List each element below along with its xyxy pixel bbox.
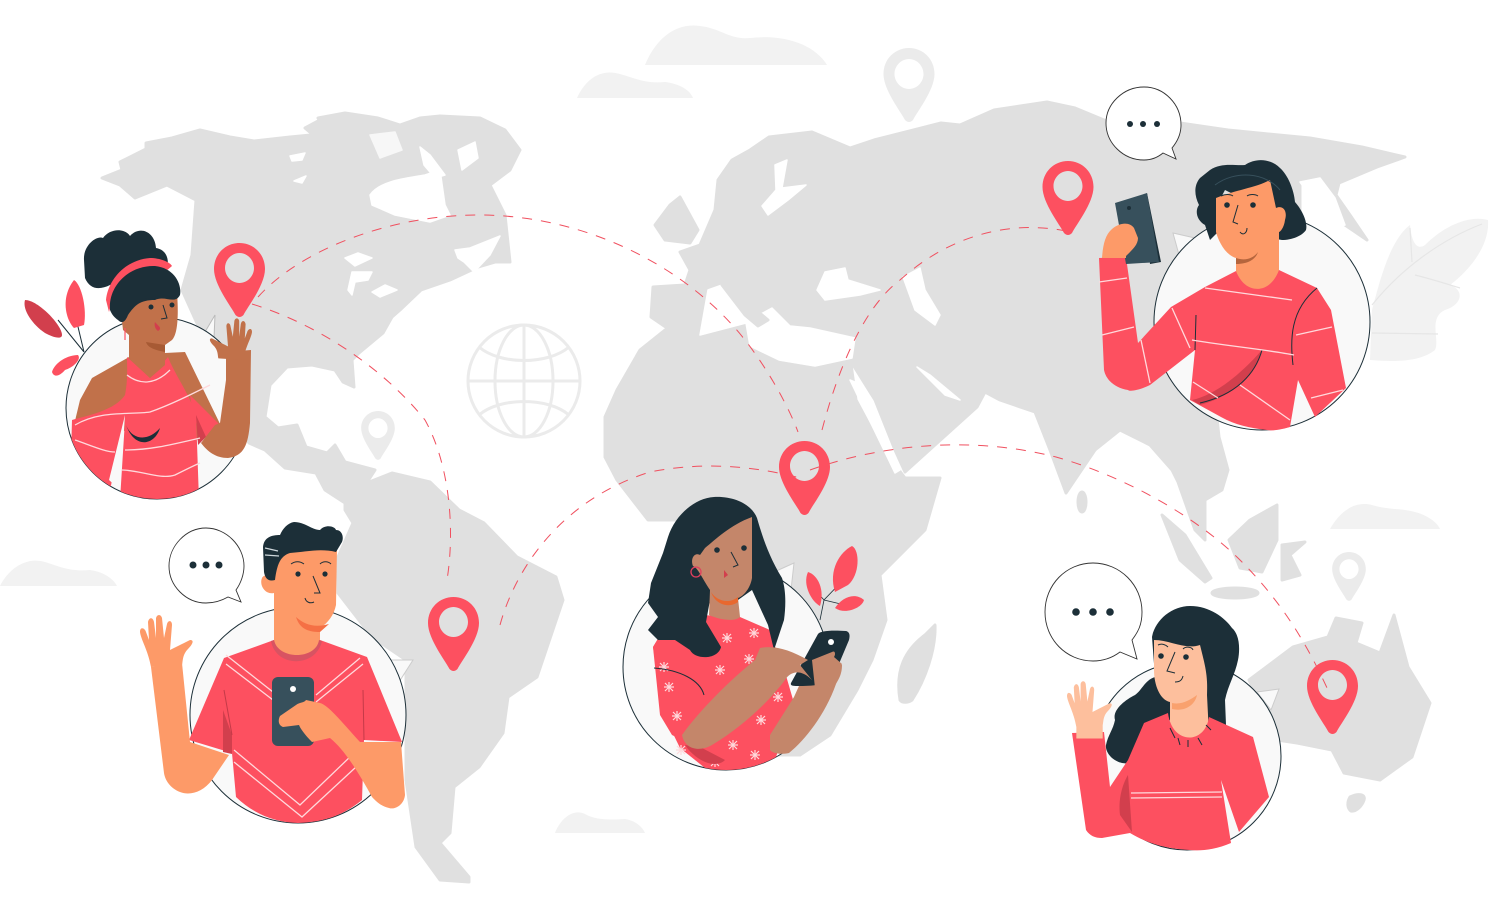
pale location pin: Mexico: [361, 411, 395, 460]
right arm and hand holding phone: [279, 700, 405, 808]
facial features: [1158, 644, 1193, 682]
neck and head: [1216, 180, 1286, 292]
red location pin: Russia: [1042, 161, 1094, 235]
neck and face: [1154, 640, 1209, 742]
hair: [648, 497, 785, 657]
speech bubble: [1106, 87, 1181, 160]
facial features: [291, 562, 331, 603]
neck and head: [261, 545, 337, 665]
fingers on phone: [812, 651, 842, 688]
hair bun: [84, 230, 168, 288]
circle backdrop and tail: [388, 660, 413, 682]
speech bubble: [169, 528, 244, 603]
red location pin: Africa: [779, 441, 830, 515]
circle backdrop and tail: [1257, 689, 1279, 710]
phone: [1115, 193, 1161, 264]
pale decorative leaf: [1370, 219, 1488, 361]
circle backdrop and tail: [1173, 233, 1195, 262]
landmass: South America: [338, 473, 563, 882]
pale location pin: Pacific: [1332, 552, 1366, 601]
facial features: [691, 545, 747, 578]
hair front: [110, 266, 180, 322]
hair: [1195, 160, 1306, 240]
circle backdrop and tail: [178, 315, 226, 370]
world map: [102, 102, 1430, 882]
phone: [791, 631, 850, 686]
person: woman with headband, top left: [25, 230, 252, 500]
hand holding phone: [1102, 224, 1138, 258]
right arm: [770, 655, 842, 754]
sweater: [1099, 257, 1346, 430]
red location pin: North America: [214, 243, 265, 317]
face and neck: [121, 292, 178, 378]
facial features: [145, 296, 176, 331]
hair: [263, 522, 343, 581]
landmass: North America: [102, 113, 520, 503]
t-shirt: [189, 640, 402, 823]
hair: [1106, 606, 1239, 765]
facial features: [1221, 194, 1258, 234]
pale location pin: top: [884, 48, 934, 122]
person: man with phone, bottom left: [140, 522, 413, 823]
clothed body clipped to circle: [70, 330, 222, 500]
waving hand: [1067, 681, 1112, 738]
Italy over the Mediterranean: [722, 283, 768, 326]
landmass: Africa: [605, 323, 940, 755]
earring: [124, 328, 126, 340]
arm and waving hand: [201, 318, 252, 458]
sweater: [1072, 713, 1269, 850]
circle backdrop and tail: [774, 563, 794, 590]
person: woman waving, bottom right: [1045, 563, 1281, 850]
globe icon: [468, 325, 580, 437]
plant: [806, 546, 864, 620]
star pattern on shirt: [659, 628, 783, 767]
landmass: Australia and islands: [305, 120, 1430, 811]
shirt: [653, 615, 794, 780]
neck and face: [692, 517, 752, 620]
person: man with phone, top right: [1099, 87, 1370, 430]
landmass: Eurasia: [651, 102, 1405, 540]
left forearm and hand on phone: [682, 647, 812, 749]
red location pin: South America: [428, 597, 479, 671]
sleeve shadow: [685, 745, 725, 764]
dashed connection routes: [252, 215, 1328, 690]
left arm and waving hand: [140, 615, 229, 794]
inland seas: [290, 132, 1345, 473]
headband: [106, 258, 172, 312]
person: woman with long hair, centre: [623, 497, 864, 780]
red location pin: Australia: [1307, 660, 1358, 734]
hair curl lines: [1215, 175, 1280, 190]
speech bubble: [1045, 563, 1142, 661]
plant: [25, 280, 85, 376]
phone: [272, 677, 314, 746]
Italy peninsula: [722, 283, 765, 326]
